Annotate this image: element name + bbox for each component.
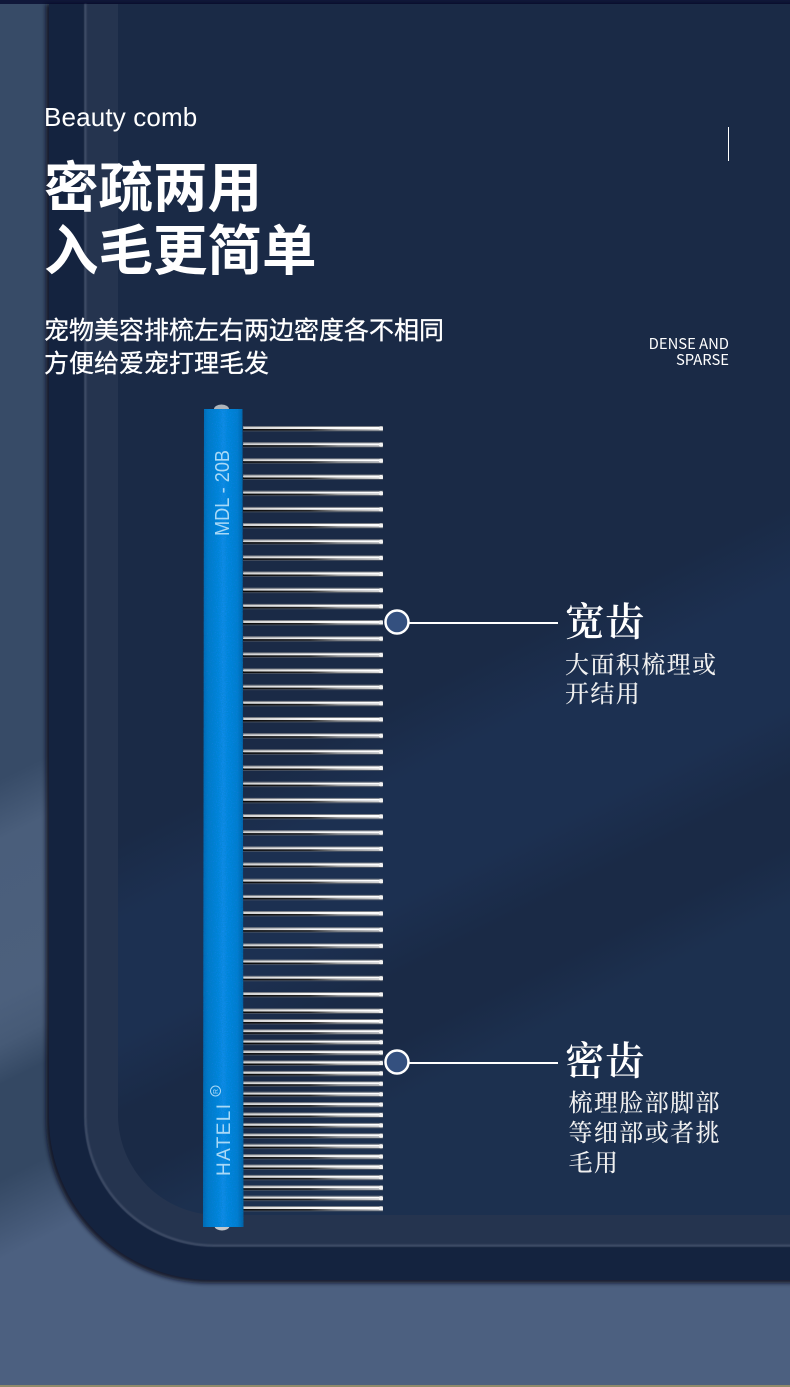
callout description: wide teeth: [565, 652, 717, 708]
subtitle text block: [44, 317, 444, 378]
callout description: dense teeth: [568, 1090, 721, 1177]
callout heading: wide teeth: 宽齿: [565, 601, 645, 645]
decorative vertical tick: [728, 127, 729, 161]
callout text: dense teeth: [565, 1040, 721, 1177]
callout description: dense teeth: 毛用: [568, 1151, 619, 1177]
eyebrow heading: Beauty comb: [44, 102, 197, 132]
side caption: dense and sparse: [649, 333, 729, 370]
callout description: dense teeth: 梳理脸部脚部: [568, 1091, 721, 1117]
callout text: wide teeth: [565, 601, 717, 708]
main title: 入毛更简单: [44, 221, 317, 282]
comb teeth: wide section: [243, 426, 383, 998]
callout description: wide teeth: 开结用: [565, 682, 641, 708]
callout description: wide teeth: 大面积梳理或: [565, 652, 717, 678]
model label on handle: MDL - 20B: [211, 450, 234, 536]
side caption: dense and sparse: DENSE AND: [649, 333, 729, 354]
callout description: dense teeth: 等细部或者挑: [568, 1121, 721, 1147]
callout: dense teeth marker: [386, 1050, 558, 1074]
brand label on handle: R: [213, 1089, 220, 1094]
callout: wide teeth marker: [386, 610, 558, 634]
callout heading: dense teeth: 密齿: [565, 1040, 645, 1084]
main title: [44, 158, 317, 282]
comb teeth: dense section: [243, 1008, 383, 1212]
subtitle text block: 方便给爱宠打理毛发: [44, 350, 269, 378]
comb handle rivets: [214, 404, 230, 1230]
main title: 密疏两用: [44, 158, 262, 219]
brand label on handle: [210, 1086, 235, 1176]
brand label on handle: HATELI: [214, 1104, 235, 1176]
subtitle text block: 宠物美容排梳左右两边密度各不相同: [44, 317, 444, 345]
side caption: dense and sparse: SPARSE: [676, 349, 729, 370]
comb handle: [203, 409, 244, 1227]
